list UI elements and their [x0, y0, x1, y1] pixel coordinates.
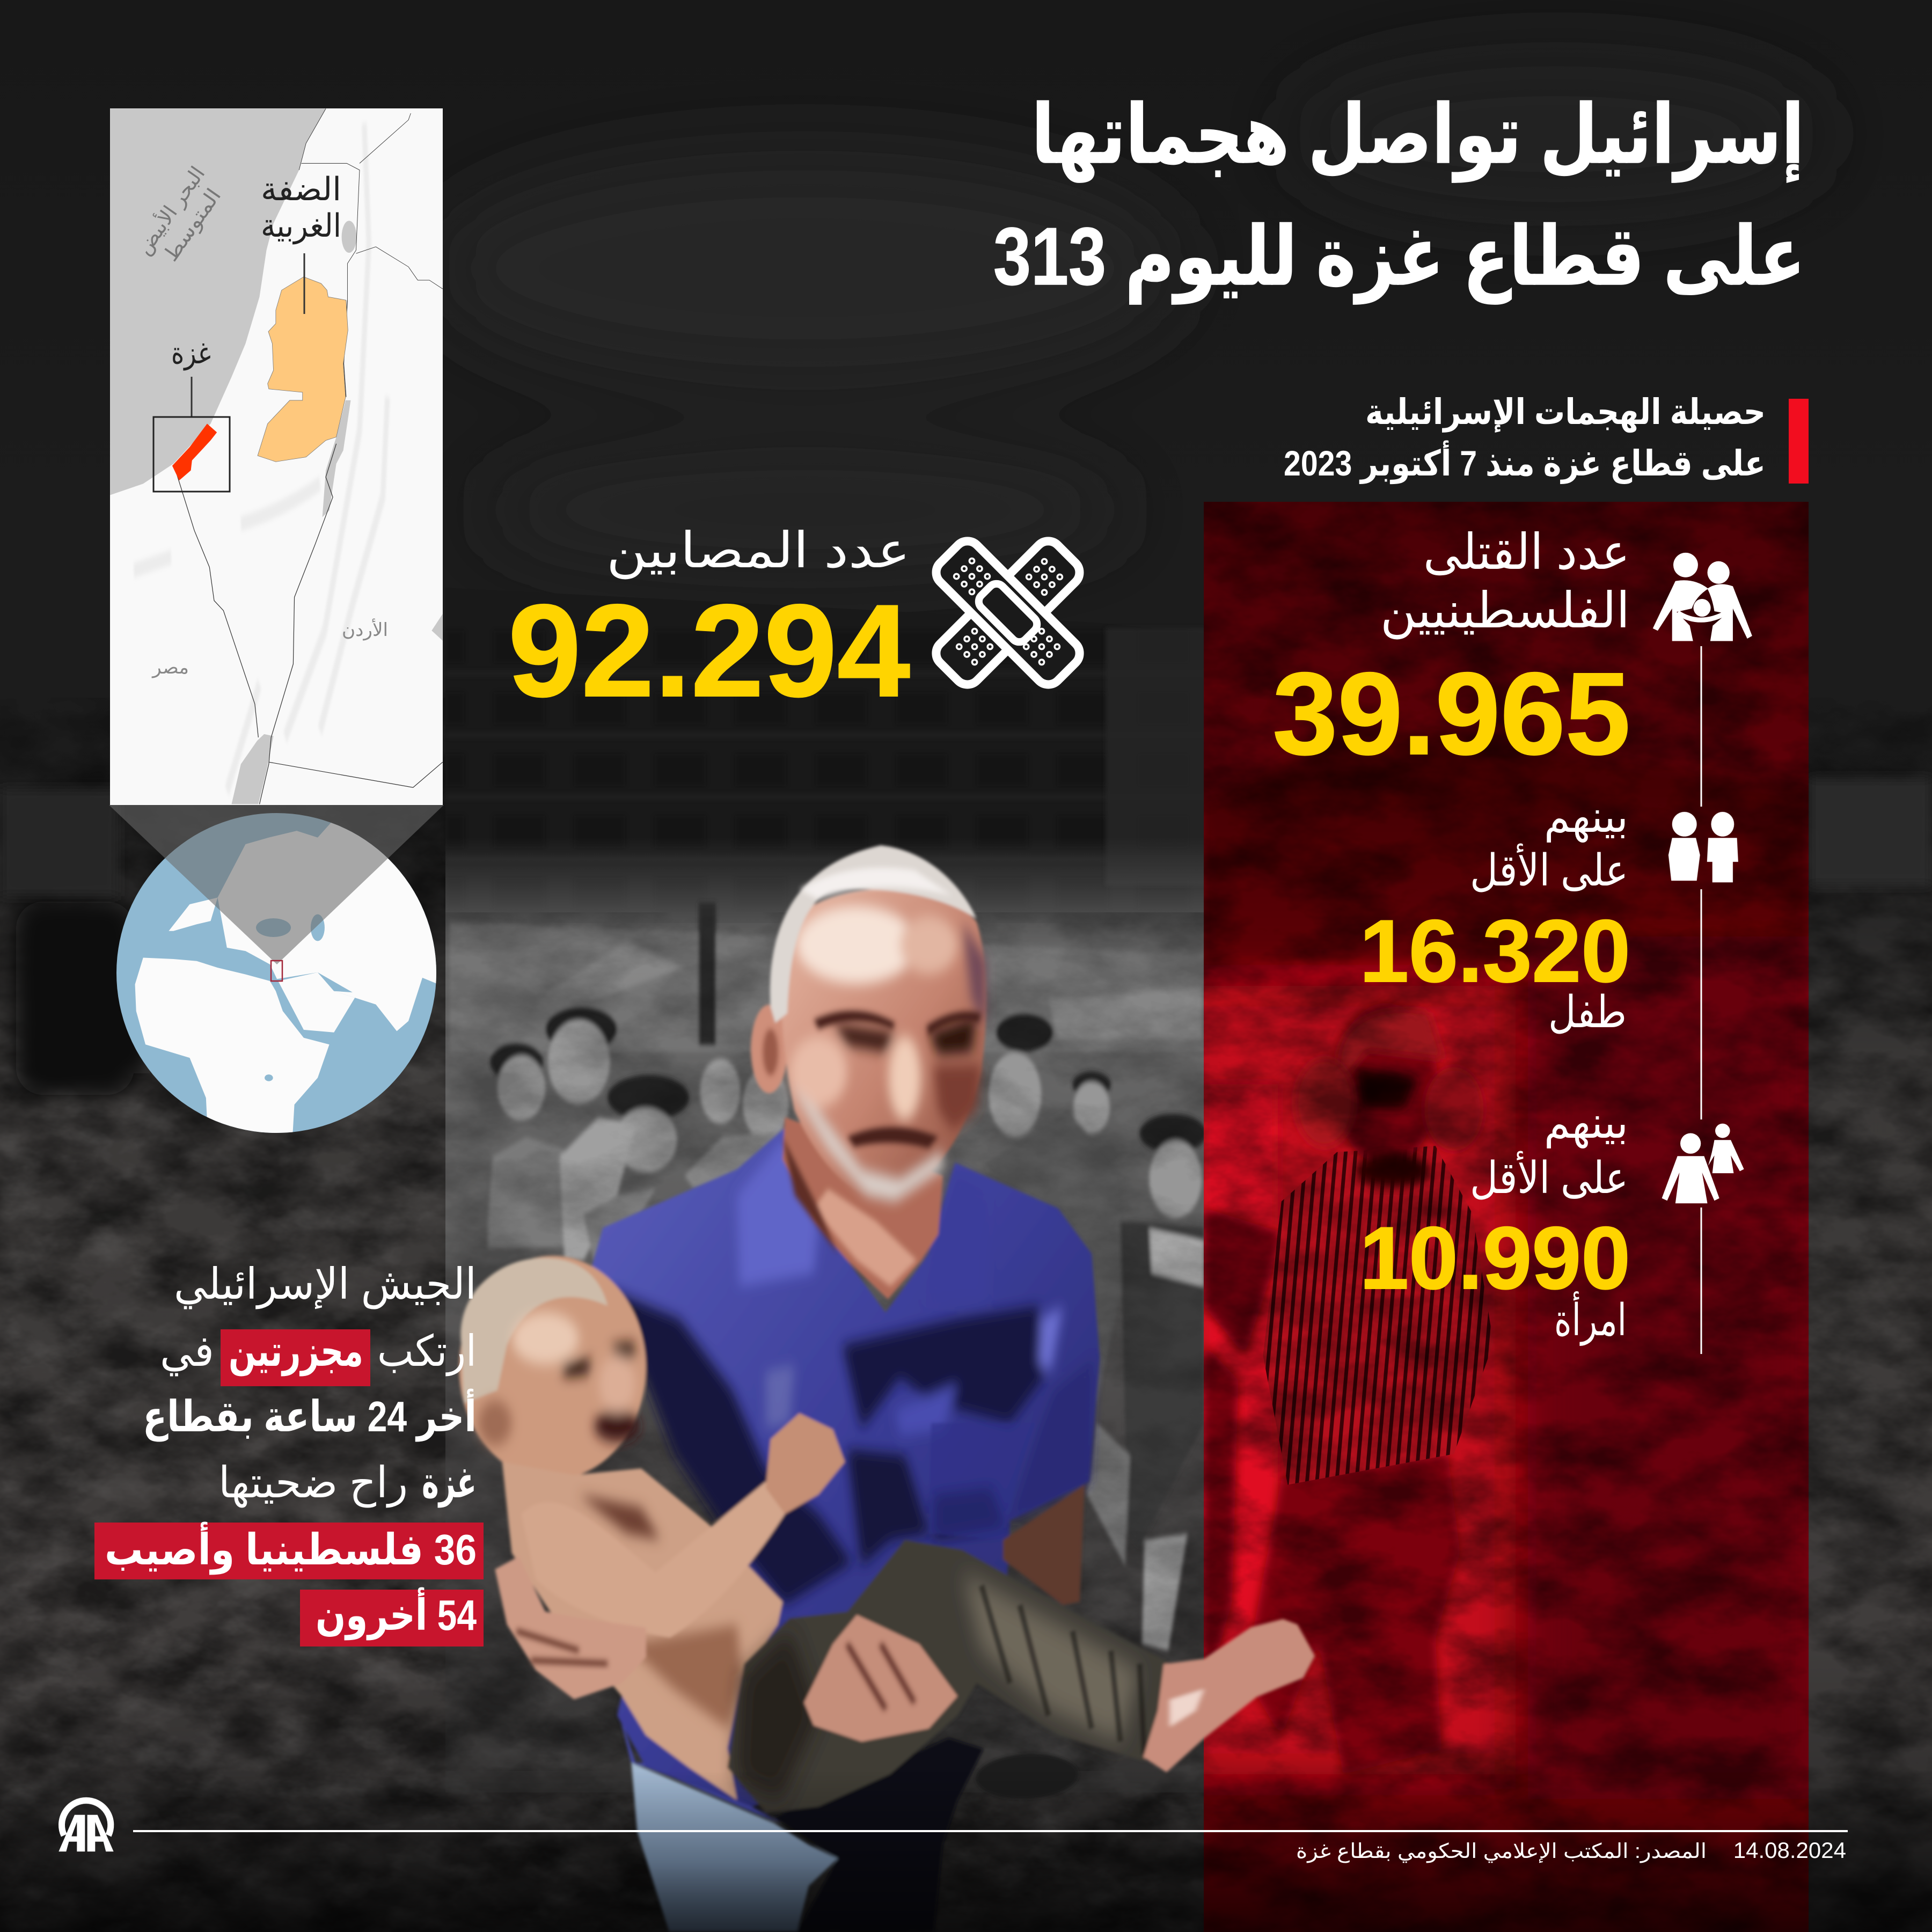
logo: AA: [58, 1801, 114, 1851]
injured number: 92.294: [508, 577, 910, 724]
child's foot: [1143, 1619, 1315, 1772]
child's arm: [521, 1481, 785, 1637]
line 4: راح ضحيتها: [218, 1459, 408, 1508]
man's left hand: [495, 1556, 646, 1699]
map leader lines: [192, 253, 304, 417]
terrain shading: [134, 123, 387, 791]
man's neck: [782, 1117, 943, 1299]
women stat: [1359, 1099, 1744, 1346]
text block: last 24 hours: [94, 1260, 484, 1646]
West Bank: [258, 277, 348, 462]
red panel scene: ruins and man in cap: [1183, 727, 1824, 1799]
women stat: على الأقل: [1470, 1151, 1628, 1203]
subtitle with red marker: [1284, 392, 1809, 485]
map label: West Bank: الضفة: [261, 171, 341, 207]
children stat: [1359, 793, 1738, 1037]
killed stat: الفلسطينيين: [1380, 583, 1630, 640]
Gaza strip: [172, 423, 217, 480]
left crowd silhouettes: [16, 902, 150, 1095]
child's head: [459, 1256, 646, 1480]
man's face: [781, 889, 986, 1201]
line 4: غزة: [422, 1459, 477, 1508]
man's torso in blue shirt: [459, 845, 1170, 1813]
sea: [110, 108, 326, 495]
killed stat: [1272, 525, 1752, 779]
subtitle with red marker: حصيلة الهجمات الإسرائيلية: [1365, 392, 1766, 433]
map label: West Bank: [261, 171, 341, 245]
injured stat: [508, 523, 1085, 724]
women labels: بينهم: [1544, 1099, 1628, 1148]
locator globe: [116, 804, 438, 1145]
map label: West Bank: الغربية: [261, 208, 341, 245]
man's ear: [751, 1005, 787, 1093]
subtitle with red marker: على قطاع غزة منذ 7 أكتوبر 2023: [1284, 440, 1766, 485]
map label: Egypt: مصر: [151, 657, 189, 678]
footer rule: [133, 1830, 1848, 1832]
child's dirty trousers: [727, 1540, 1170, 1813]
date: 14.08.2024: [1733, 1838, 1846, 1863]
women number: 10.990: [1359, 1209, 1630, 1307]
killed label: عدد القتلى: [1423, 525, 1630, 580]
children labels: بينهم: [1544, 793, 1628, 843]
children stat: على الأقل: [1470, 844, 1628, 895]
killed number: 39.965: [1272, 649, 1630, 779]
locator rectangle on globe: [271, 961, 282, 981]
central grey crowd zone: [445, 837, 1208, 1792]
highlight: 36 Palestinians: 36 فلسطينيا وأصيب: [105, 1522, 477, 1575]
map panel: [110, 108, 443, 805]
children number: 16.320: [1359, 902, 1630, 1000]
icon: family: [1653, 553, 1752, 641]
country borders: [174, 108, 443, 804]
bottom darkening: [0, 1771, 1932, 1932]
panel: red tinted casualties photo: [1183, 502, 1824, 1932]
child's torso: [502, 1462, 782, 1800]
line 2: في: [160, 1327, 214, 1377]
line 2: مجزرتين: [229, 1327, 363, 1377]
map label: Jordan: الأردن: [342, 618, 388, 640]
women unit: امرأة: [1554, 1291, 1627, 1346]
line 1: الجيش الإسرائيلي: [174, 1260, 477, 1309]
icon: women: [1662, 1124, 1744, 1203]
icon: children: [1668, 812, 1738, 882]
map label: Gaza: غزة: [171, 336, 211, 371]
title: [993, 89, 1805, 305]
injured label: عدد المصابين: [606, 523, 910, 580]
man's forearm: [1003, 1485, 1085, 1605]
line 2: ارتكب: [377, 1327, 477, 1377]
children unit: طفل: [1548, 988, 1627, 1037]
map label: Mediterranean: البحر الأبيض: [131, 162, 210, 259]
title: على قطاع غزة لليوم 313: [993, 211, 1805, 305]
highlight: massacres: [221, 1329, 370, 1386]
line 2: [160, 1327, 477, 1377]
zoom wedge from globe to map: [109, 805, 444, 964]
man's right hand: [804, 1615, 957, 1741]
man's legs and jeans: [617, 1705, 1094, 1932]
highlight: 54 others: 54 أخرون: [316, 1587, 477, 1641]
child's fist: [766, 1413, 845, 1514]
connector lines: [1700, 646, 1702, 1354]
icon: crossed bandages: [931, 536, 1085, 690]
main photo: man carrying injured child: [459, 845, 1315, 1932]
man's hair: [770, 845, 977, 1023]
line 3: أخر 24 ساعة بقطاع: [143, 1389, 477, 1442]
map label: Mediterranean: المتوسط: [159, 185, 226, 266]
footer: [58, 1801, 1848, 1863]
Gaza locator box: [153, 417, 230, 492]
lakes and gulf: [231, 221, 443, 804]
destroyed buildings behind centre: [0, 588, 1932, 923]
source: المصدر: المكتب الإعلامي الحكومي بقطاع غزة: [1296, 1840, 1707, 1863]
